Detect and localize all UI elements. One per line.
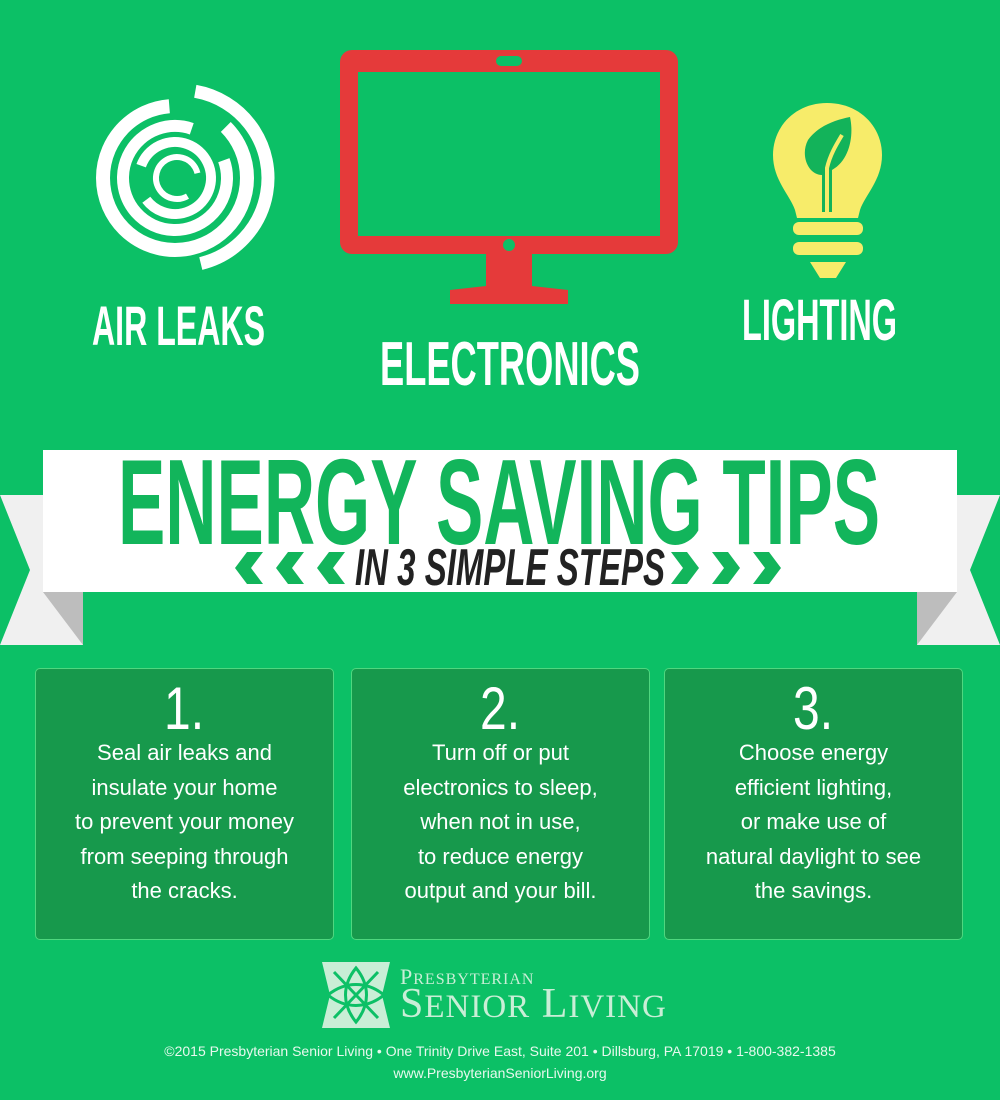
- panel: step 2: when not in use,: [420, 809, 581, 834]
- panel: step 3: 3.: [793, 675, 834, 742]
- panel: step 3: Choose energy: [739, 740, 888, 765]
- panel: step 2: 2.: [480, 675, 521, 742]
- footer: www.PresbyterianSeniorLiving.org: [393, 1065, 607, 1081]
- panel: step 2: Turn off or put: [432, 740, 569, 765]
- icon: air swirl: [96, 84, 274, 270]
- title: [118, 440, 880, 592]
- panel: step 1: Seal air leaks and: [97, 740, 272, 765]
- panel: step 2: electronics to sleep,: [403, 774, 598, 800]
- panel: step 1: to prevent your money: [75, 809, 294, 834]
- panel: step 3: or make use of: [741, 809, 886, 834]
- panel: step 2: output and your bill.: [404, 878, 597, 903]
- footer: ©2015 Presbyterian Senior Living • One Trinity Drive East, Suite 201 • Dillsburg, PA 17019 • 1-800-382-1385: [164, 1043, 836, 1059]
- banner ribbon: [0, 450, 1000, 645]
- panel: step 3: natural daylight to see: [706, 844, 921, 868]
- panel: step 2: [351, 668, 650, 940]
- panel: step 3: [664, 668, 963, 940]
- panel: step 1: 1.: [164, 675, 205, 742]
- logo: [322, 962, 667, 1028]
- logo text: PRESBYTERIAN: [400, 964, 534, 989]
- panel: step 1: from seeping through: [81, 844, 288, 868]
- subtitle with chevrons: [235, 539, 781, 597]
- panel: step 2: to reduce energy: [418, 844, 583, 868]
- panel: step 1: [35, 668, 334, 940]
- logo: SENIOR LIVING: [400, 981, 667, 1027]
- icon: monitor: [340, 50, 678, 304]
- footer: [164, 1043, 836, 1081]
- panel: step 1: insulate your home: [92, 774, 277, 800]
- icon: logo flower: [322, 962, 390, 1028]
- panel: step 3: the savings.: [755, 878, 872, 903]
- panel: step 1: the cracks.: [131, 878, 238, 903]
- panel: step 3: efficient lighting,: [735, 774, 892, 800]
- icon: lightbulb: [773, 103, 882, 278]
